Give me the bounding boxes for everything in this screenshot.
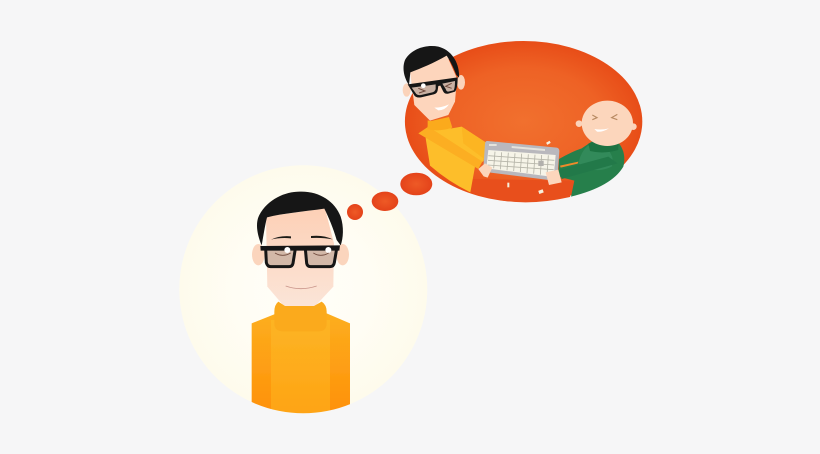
panel: orange thought oval: [405, 41, 642, 202]
hands: [478, 163, 562, 185]
man torso: [418, 123, 486, 192]
face: [266, 208, 334, 307]
mouth: [286, 286, 317, 289]
flying key fragments: [507, 141, 551, 194]
turtleneck collar: [274, 302, 327, 331]
infographic illustration: [180, 41, 642, 414]
eyebrows: [271, 236, 333, 240]
glasses: [260, 245, 340, 267]
child head: [576, 101, 637, 146]
man ears and head: [403, 46, 465, 130]
panel: cream circle: [179, 165, 427, 413]
scene: man and child fighting over keyboard: [403, 46, 637, 202]
figure: calm man with eyes closed: [252, 192, 350, 420]
hair: [257, 192, 343, 245]
child body: [558, 140, 624, 197]
sweater body: [252, 313, 350, 420]
ears: [252, 244, 349, 265]
floor wedge: [470, 179, 574, 202]
keyboard: [483, 141, 559, 181]
thought bubbles: [347, 173, 432, 220]
